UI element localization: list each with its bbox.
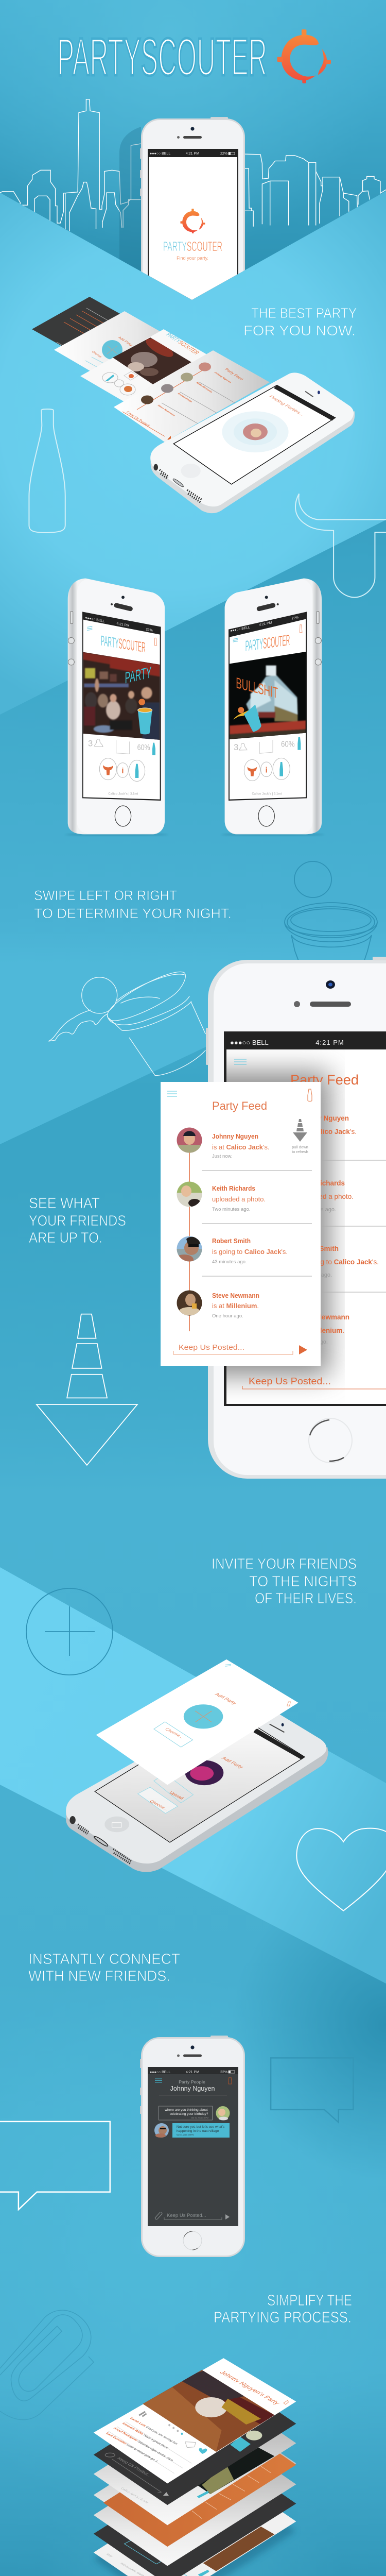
icon: pull to refresh outline <box>37 1314 137 1465</box>
background feed text: Johnny Nguyen <box>297 1114 349 1122</box>
venue labels: Mall <box>105 2553 113 2557</box>
iso feed text <box>125 367 244 429</box>
icon: heart outline <box>296 1828 386 1911</box>
background feed text: Two minutes ago. <box>292 1207 336 1213</box>
hamburger icon <box>167 1091 177 1096</box>
background feed text: Keith Richards <box>296 1179 345 1187</box>
icon: dark cup and ball outline <box>285 861 377 963</box>
icon: bull head outline <box>295 494 386 597</box>
venue labels: Calico Jack's / 3.1mi <box>119 2487 149 2504</box>
iso phone: add party <box>66 1700 328 1872</box>
iso feed text: Steve Newmann <box>156 404 176 417</box>
iso feed text: Keith Richards <box>195 382 213 394</box>
heading: simplify: SIMPLIFY THE <box>267 2291 352 2309</box>
heading: invite: TO THE NIGHTS <box>249 1573 357 1590</box>
status bar text: ●●●○○ BELL <box>150 152 170 156</box>
avatar <box>216 2106 230 2121</box>
feed text: Just now. <box>212 1154 233 1159</box>
background feed title: Party Feed <box>290 1072 359 1088</box>
avatars <box>177 1127 202 1316</box>
phone: swipe right party: 60% <box>137 743 150 752</box>
feed text: Johnny Nguyen <box>212 1132 258 1140</box>
stats row: 3 <box>88 738 93 748</box>
action buttons <box>244 758 290 781</box>
iso screen: add party <box>54 311 191 389</box>
background feed text <box>292 1114 379 1345</box>
comment lines: Sarah Luis Glad you are having fun <box>129 2417 179 2445</box>
incoming bubble <box>172 2123 230 2138</box>
action buttons <box>99 758 145 782</box>
ball and cup <box>233 710 249 720</box>
layer: orange <box>103 2421 296 2547</box>
splash wordmark: PARTYSCOUTER <box>163 239 222 254</box>
icon: tipped cup with splash <box>48 972 205 1076</box>
feed text: is at Calico Jack's. <box>212 1143 270 1151</box>
layer: top party detail <box>94 2358 296 2483</box>
status bar: ●●●○○ BELL <box>230 625 250 633</box>
phone: swipe left bull: 60% <box>281 740 295 749</box>
finding parties label: Finding Parties... <box>268 395 306 417</box>
status bar: 22% <box>292 616 299 621</box>
heading: swipe: TO DETERMINE YOUR NIGHT. <box>34 906 232 921</box>
background feed text: is at Millenium. <box>295 1327 344 1334</box>
party title: Johnny Nguyen's Party <box>218 2370 282 2406</box>
iso screen: party feed <box>114 350 270 442</box>
floating add party screen <box>96 1659 299 1785</box>
contact name: Johnny Nguyen <box>170 2085 215 2092</box>
status bar: 4:21 PM <box>186 2071 199 2074</box>
night building photo <box>228 651 307 740</box>
feed text: is at Millenium. <box>212 1302 259 1310</box>
large phone: party feed <box>206 957 386 1479</box>
party photo <box>185 1760 223 1785</box>
light chevron panel <box>0 191 386 715</box>
outgoing bubble <box>159 2106 212 2120</box>
add party label: Add Party <box>214 1692 238 1706</box>
avatar <box>154 2123 169 2138</box>
feed text: One hour ago. <box>212 1313 243 1319</box>
stats row: 3 <box>234 742 238 752</box>
background feed text: Steve Newmann <box>296 1313 349 1321</box>
home button <box>309 1418 352 1463</box>
iso feed text: Johnny Nguyen <box>213 371 232 384</box>
layer: dark <box>94 2453 296 2576</box>
heading: the best party <box>243 305 357 338</box>
neon bullshit text: BULLSHIT <box>236 674 278 702</box>
status bar <box>85 616 153 633</box>
status bar: 22% <box>146 628 153 633</box>
background feed text: is going to Calico Jack's. <box>300 1258 379 1266</box>
status bar text: 4:21 PM <box>186 152 199 156</box>
feed text: uploaded a photo. <box>212 1195 266 1203</box>
outgoing bubble: celebrating your birthday? <box>170 2112 208 2116</box>
heading: see what: ARE UP TO. <box>29 1230 102 1246</box>
heading: invite: INVITE YOUR FRIENDS <box>212 1556 357 1572</box>
status bar text: 22% <box>220 152 227 156</box>
card shadow on screen <box>226 1053 345 1395</box>
choose label: Choose <box>91 351 102 358</box>
status bar: ●●●○○ BELL <box>230 1039 269 1046</box>
timeline <box>189 1140 190 1331</box>
iso feed text: Robert Smith <box>177 393 193 403</box>
venue label: Calico Jack's | 3.1mi <box>252 793 282 796</box>
heading: instantly connect: WITH NEW FRIENDS. <box>28 1968 170 1985</box>
iso buttons <box>102 371 138 395</box>
icon: paperclip outline <box>0 2310 94 2420</box>
layer: venue detail <box>94 2471 296 2576</box>
bottle icon <box>308 1089 312 1101</box>
venue labels <box>105 2487 170 2576</box>
message input: Keep Us Posted... <box>167 2213 206 2218</box>
status bar <box>230 616 299 633</box>
pull to refresh icon: pull down <box>292 1145 308 1149</box>
neon party text: PARTY <box>125 663 151 687</box>
iso feed text: Party Feed <box>224 367 244 381</box>
incoming bubble: Not sure yet, but let's see what's <box>177 2125 225 2129</box>
heading: invite <box>212 1556 357 1607</box>
screen stack <box>94 2358 296 2576</box>
layer: white <box>94 2433 296 2566</box>
background feed text: uploaded a photo. <box>298 1193 354 1200</box>
background input: Keep Us Posted... <box>249 1376 331 1386</box>
icon: blue speech bubble <box>271 2058 353 2122</box>
heading: invite: OF THEIR LIVES. <box>255 1590 357 1607</box>
card title: Party Feed <box>212 1099 267 1112</box>
choose button <box>154 1722 193 1747</box>
add button <box>102 340 122 360</box>
comment lines <box>104 2417 179 2463</box>
heading: simplify <box>214 2291 352 2326</box>
heading: swipe <box>34 888 232 921</box>
logo icon <box>277 29 331 83</box>
pulse rings <box>222 411 289 452</box>
outgoing bubble: Mar 31, 2014 3:50PM <box>191 2117 208 2119</box>
heading: simplify: PARTYING PROCESS. <box>214 2308 352 2326</box>
outgoing bubble: where are you thinking about <box>164 2108 208 2112</box>
comment lines: Angel Rodriguez Saturday night drinks. Nice <box>112 2427 174 2462</box>
phone: splash screen <box>119 117 245 300</box>
add button <box>184 1704 223 1728</box>
phone text: add party <box>148 1756 244 1811</box>
status bar text <box>150 152 235 155</box>
feed text: Steve Newmann <box>212 1292 259 1299</box>
feed text: is going to Calico Jack's. <box>212 1248 288 1256</box>
iso avatars <box>141 363 211 404</box>
stack shadow <box>94 2479 296 2576</box>
dark layer input text: Keep Us Posted... <box>116 2456 153 2477</box>
incoming bubble: Mar 31, 2014 3:58PM <box>177 2134 194 2136</box>
phone: swipe left bull: i <box>266 766 268 774</box>
incoming bubble: happening in the east village <box>177 2129 219 2133</box>
icon: plus circle outline <box>26 1588 113 1675</box>
iso screen: dark chat list <box>32 297 157 367</box>
heading: swipe: SWIPE LEFT OR RIGHT <box>34 888 177 903</box>
phone text: add party: Add Party <box>220 1756 244 1770</box>
heading: see what <box>29 1195 126 1246</box>
home button <box>183 2231 202 2250</box>
phone: chat <box>140 2036 245 2257</box>
iso feed text: Keep Us Posted... <box>125 411 152 429</box>
venue label: Calico Jack's | 3.1mi <box>108 793 138 796</box>
splash tagline: Find your party. <box>177 256 208 261</box>
ball and cup <box>138 699 145 705</box>
heading: the best party: THE BEST PARTY <box>251 305 357 321</box>
heading: see what: YOUR FRIENDS <box>29 1213 126 1229</box>
background feed text: is at Calico Jack's. <box>297 1128 357 1136</box>
feed text: 43 minutes ago. <box>212 1259 247 1265</box>
pull to refresh icon <box>292 1119 308 1154</box>
feed text: Two minutes ago. <box>212 1207 250 1212</box>
status bar: 4:21 PM <box>117 622 130 628</box>
iso phone: finding parties <box>150 372 355 513</box>
background feed text: One hour ago. <box>292 1339 328 1345</box>
status bar: 4:21 PM <box>259 621 272 627</box>
comment lines: Kenneth Willis Have a great time! <box>121 2422 169 2449</box>
comment lines: Sam Gonzalez Look at those girls go :) <box>104 2432 159 2463</box>
add party label: Add Party <box>117 336 133 347</box>
bar photo <box>82 651 161 742</box>
status bar <box>230 1039 344 1046</box>
layer: white with night photo <box>94 2393 296 2525</box>
pull to refresh icon: to refresh <box>292 1149 308 1154</box>
status bar: 22% <box>220 2071 227 2074</box>
message input <box>155 2212 230 2219</box>
heading: instantly connect: INSTANTLY CONNECT <box>28 1951 180 1968</box>
status bar <box>150 2071 235 2074</box>
light diagonal band <box>0 1567 386 1984</box>
icon: white speech bubble <box>0 2122 110 2210</box>
phone: swipe left bull <box>221 579 324 836</box>
heading: see what: SEE WHAT <box>29 1195 100 1212</box>
wordmark: PARTYSCOUTER <box>101 632 146 655</box>
status bar: 4:21 PM <box>315 1039 344 1046</box>
input: Keep Us Posted... <box>179 1344 244 1352</box>
feed text: Robert Smith <box>212 1237 251 1245</box>
party feed card <box>161 1082 321 1366</box>
city skyline outline <box>0 99 386 231</box>
iso screen: swipe card <box>80 329 206 401</box>
layer: dark chat <box>94 2374 296 2505</box>
iso bar photo <box>113 335 191 384</box>
phone: swipe right party <box>65 579 168 836</box>
heading: the best party: FOR YOU NOW. <box>243 323 356 338</box>
background feed text: 43 minutes ago. <box>292 1272 332 1278</box>
phone: swipe right party: i <box>121 767 124 775</box>
status bar: ●●●○○ BELL <box>85 616 105 623</box>
feed text <box>212 1132 288 1319</box>
choose label: Choose... <box>164 1727 185 1739</box>
heading: instantly connect <box>28 1951 180 1985</box>
feed text: Keith Richards <box>212 1184 255 1192</box>
status bar: ●●●○○ BELL <box>150 2071 170 2074</box>
iso wordmark: PARTYSCOUTER <box>165 332 201 355</box>
input <box>173 1344 307 1354</box>
phone text: add party: Choose... <box>148 1799 170 1811</box>
phone text: add party: Upload <box>168 1790 185 1800</box>
splash logo <box>180 209 205 233</box>
layer: gray sheet <box>94 2413 296 2545</box>
phone: swipe left bull: PARTYSCOUTER <box>245 632 290 655</box>
chat title: Party People <box>179 2079 205 2084</box>
background feed text: Robert Smith <box>295 1245 339 1252</box>
icon: bottle outline <box>29 409 65 533</box>
